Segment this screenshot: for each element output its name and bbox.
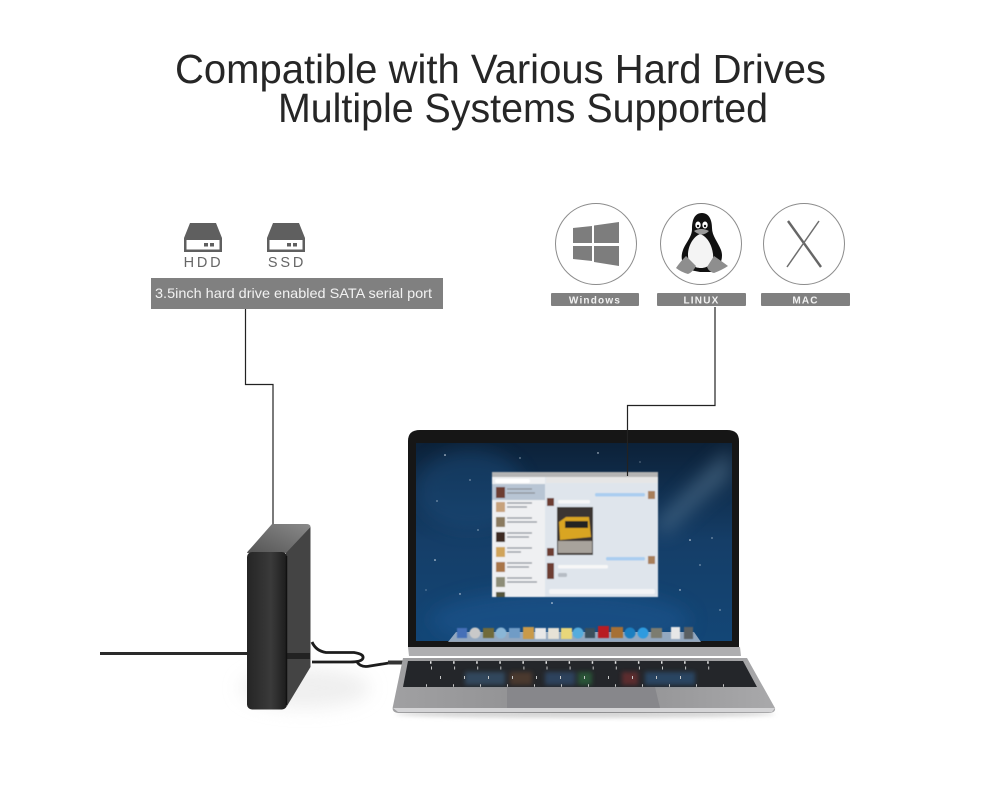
hard drive enclosure — [100, 524, 407, 710]
label: MAC — [761, 293, 850, 306]
icon: Mac X — [764, 204, 844, 284]
keyboard — [403, 661, 757, 687]
messages window — [492, 472, 658, 597]
icon: HDD: HDD — [184, 255, 223, 271]
screen wallpaper — [415, 443, 732, 650]
laptop lid — [408, 430, 739, 647]
laptop — [393, 430, 775, 718]
connector: SATA label to drive enclosure — [246, 309, 273, 527]
title: Multiple Systems Supported — [278, 85, 768, 131]
label: Windows: Windows — [569, 296, 621, 306]
label: SATA port — [151, 278, 443, 309]
title: Compatible with Various Hard Drives — [175, 46, 826, 92]
icon: SSD: SSD — [268, 255, 306, 271]
title — [175, 46, 826, 131]
label: LINUX: LINUX — [684, 296, 720, 306]
icon: Windows — [556, 204, 636, 284]
icon: Linux penguin — [660, 204, 742, 284]
trackpad — [507, 687, 660, 708]
label: LINUX — [657, 293, 746, 306]
icon: SSD — [267, 223, 306, 271]
laptop base — [393, 658, 775, 713]
connector: LINUX label to laptop screen — [628, 307, 715, 476]
label: MAC: MAC — [792, 296, 819, 306]
icon: HDD — [184, 223, 223, 271]
dock — [448, 626, 701, 642]
label: SATA port: 3.5inch hard drive enabled SATA serial port — [155, 285, 432, 301]
label: Windows — [551, 293, 639, 306]
